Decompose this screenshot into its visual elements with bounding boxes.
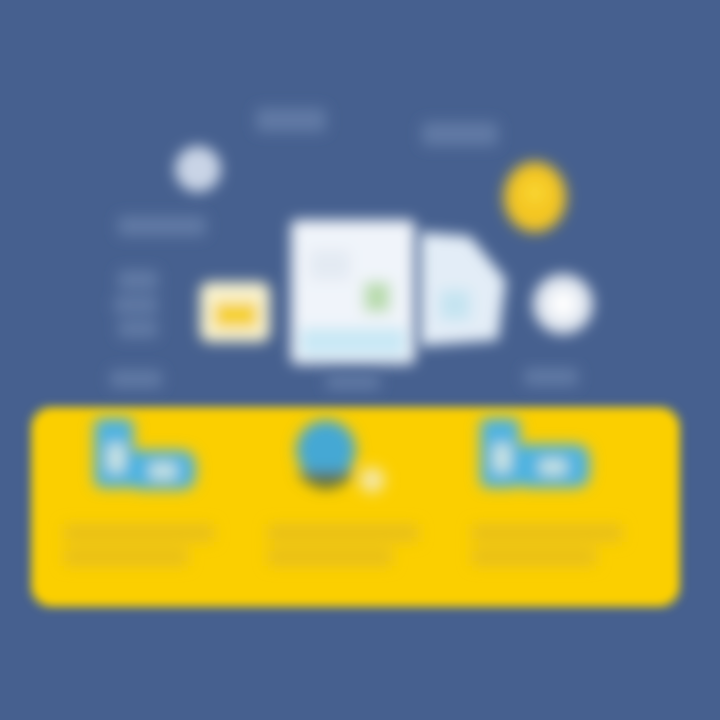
icon: yellow pin circle bbox=[504, 162, 566, 232]
icon: blue graphic left bbox=[94, 418, 196, 490]
text block right bbox=[472, 524, 622, 566]
panel: yellow banner halo bbox=[28, 404, 683, 610]
secondary document bbox=[420, 232, 506, 346]
icon: yellow envelope bbox=[200, 282, 270, 342]
icon: globe center bbox=[296, 420, 385, 493]
top labels bbox=[118, 108, 498, 236]
icon: white circle right bbox=[533, 274, 593, 334]
icon: pale circle top left bbox=[175, 146, 221, 192]
icon: blue graphic right bbox=[480, 418, 590, 488]
left column of labels bbox=[110, 270, 162, 388]
text block center bbox=[268, 524, 418, 566]
bottom small labels bbox=[326, 368, 578, 390]
central document bbox=[291, 220, 415, 364]
text block left bbox=[64, 524, 214, 566]
panel: yellow banner bbox=[33, 409, 678, 605]
